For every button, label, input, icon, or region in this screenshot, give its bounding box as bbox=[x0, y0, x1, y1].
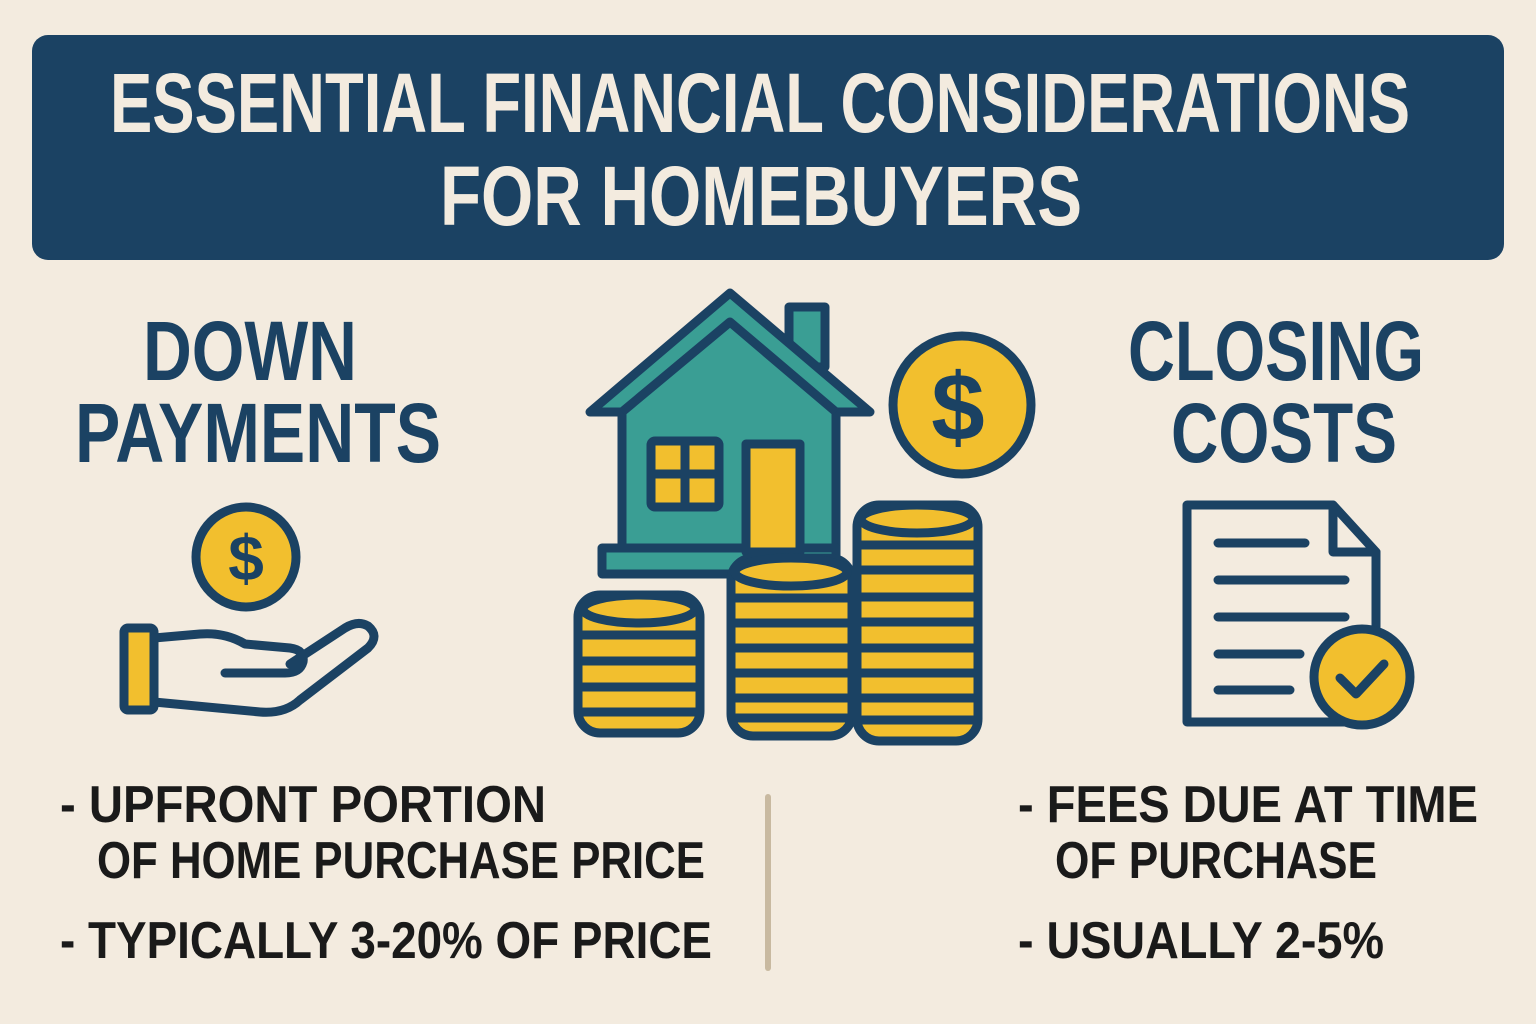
text block: closing costs bullets bbox=[1018, 776, 1478, 970]
middle stack bbox=[731, 558, 852, 736]
chimney bbox=[789, 307, 825, 367]
text block: closing costs bullets: - USUALLY 2-5% bbox=[1018, 912, 1384, 970]
heading: closing costs: CLOSING bbox=[1128, 304, 1424, 398]
title banner bbox=[32, 35, 1504, 260]
heading: closing costs bbox=[1128, 304, 1424, 480]
text block: down payments bullets: OF HOME PURCHASE PRICE bbox=[97, 832, 705, 890]
title banner: FOR HOMEBUYERS bbox=[440, 149, 1082, 243]
text block: down payments bullets bbox=[60, 776, 712, 970]
icon: house with coins bbox=[578, 293, 1031, 741]
icon: hand with coin: $ bbox=[228, 522, 264, 594]
coin with dollar bbox=[893, 336, 1031, 474]
text block: down payments bullets: - TYPICALLY 3-20% OF PRICE bbox=[60, 912, 712, 970]
text block: closing costs bullets: OF PURCHASE bbox=[1055, 832, 1377, 890]
text block: down payments bullets: - UPFRONT PORTION bbox=[60, 776, 546, 834]
left stack bbox=[578, 595, 700, 733]
heading: down payments: PAYMENTS bbox=[75, 386, 441, 480]
icon: hand with coin bbox=[124, 507, 374, 712]
text block: closing costs bullets: - FEES DUE AT TIME bbox=[1018, 776, 1478, 834]
icon: document with check bbox=[1187, 505, 1410, 725]
heading: down payments bbox=[75, 304, 441, 480]
icon: house with coins: $ bbox=[931, 354, 985, 461]
heading: closing costs: COSTS bbox=[1171, 386, 1397, 480]
divider bbox=[765, 797, 771, 968]
right stack bbox=[857, 505, 978, 741]
heading: down payments: DOWN bbox=[143, 304, 357, 398]
